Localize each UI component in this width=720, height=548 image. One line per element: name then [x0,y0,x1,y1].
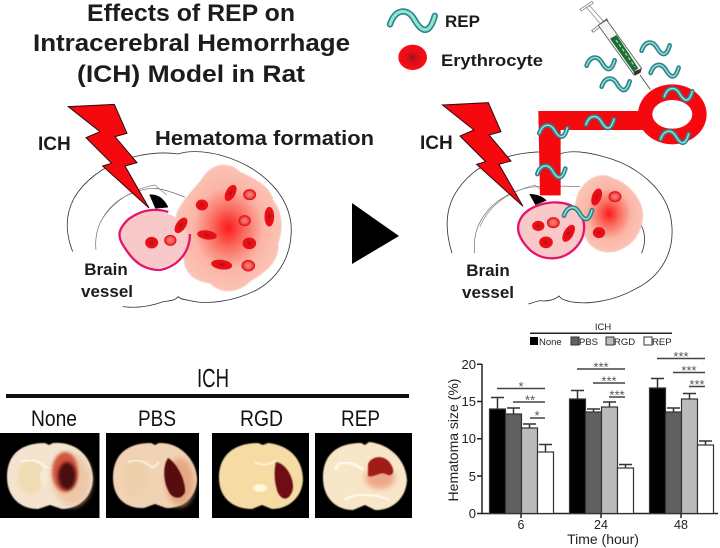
photo: PBS [106,433,199,518]
ventricle [529,194,547,205]
significance stars: *** [681,363,697,378]
REP peptides [587,58,615,69]
title: Intracerebral Hemorrhage [33,30,350,57]
label: ICH: ICH [38,134,71,155]
heading: ICH: ICH [197,363,229,393]
photo: None [0,433,100,518]
significance stars: ** [525,392,535,408]
photo labels: RGD [240,406,283,431]
blood vessel with injection ring [538,111,643,195]
brain and hematoma drawing [67,104,291,307]
label: brain vessel [81,260,133,301]
legend heading: ICH: ICH [595,322,611,333]
significance stars [518,349,705,423]
panel: hematoma size bar chart [445,322,718,547]
y axis labels: 10 [462,431,476,446]
legend: erythrocyte icon [398,45,427,70]
y axis title: Hematoma size (%) [445,379,461,501]
significance stars: *** [689,377,705,392]
legend: PBS [579,337,598,348]
panel: REP treatment diagram [390,1,707,304]
x axis labels: 48 [674,518,688,532]
label: brain vessel [462,261,514,302]
title: Effects of REP on [87,0,295,27]
title [33,0,350,88]
significance stars: * [518,379,524,394]
y axis labels: 15 [462,394,476,409]
arrow [352,203,399,264]
title: (ICH) Model in Rat [77,61,305,88]
photo: RGD [212,433,309,518]
erythrocytes [146,184,274,270]
ventricle [149,194,168,209]
lightning bolt [68,104,149,208]
syringe [580,1,650,89]
photo labels: None [31,406,77,431]
legend: REP icon [390,11,435,30]
legend: REP [652,337,672,348]
photo labels [31,406,380,431]
label: Erythrocyte: Erythrocyte [441,51,543,70]
significance brackets [497,358,705,418]
erythrocytes [533,188,605,248]
label: ICH: ICH [420,133,453,154]
error bars [491,378,712,468]
lightning bolt [442,103,523,206]
photo labels: REP [341,406,380,431]
label: brain vessel: Brain [84,260,128,279]
panel: brain section photos [0,363,412,518]
y axis labels: 20 [462,357,476,372]
label: brain vessel: Brain [466,261,510,280]
axes [477,364,718,518]
label: brain vessel: vessel [462,283,514,302]
significance stars: *** [593,360,609,374]
significance stars: *** [673,349,689,364]
label: hematoma formation: Hematoma formation [155,128,374,150]
significance stars: * [534,408,540,423]
legend [530,337,672,348]
brain vessel [120,210,187,268]
photo labels: PBS [138,406,176,431]
brain outline [447,152,672,304]
bars [490,388,714,514]
x axis title: Time (hour) [567,531,639,547]
brain outline [67,152,291,307]
y axis labels [462,357,476,521]
photo: REP [315,433,412,518]
hematoma [575,175,643,252]
legend: None [539,337,562,348]
x axis labels: 24 [594,518,608,532]
significance stars: *** [609,388,625,402]
x axis labels: 6 [518,518,525,532]
label: brain vessel: vessel [81,282,133,301]
panel: ICH hematoma formation diagram [38,104,374,307]
x axis labels [518,518,688,532]
brain vessel [518,202,584,258]
significance stars: *** [601,374,617,388]
label: REP: REP [445,12,480,31]
legend: RGD [614,337,635,348]
y axis labels: 0 [469,506,476,521]
hematoma [175,165,282,291]
y axis labels: 5 [469,469,476,484]
